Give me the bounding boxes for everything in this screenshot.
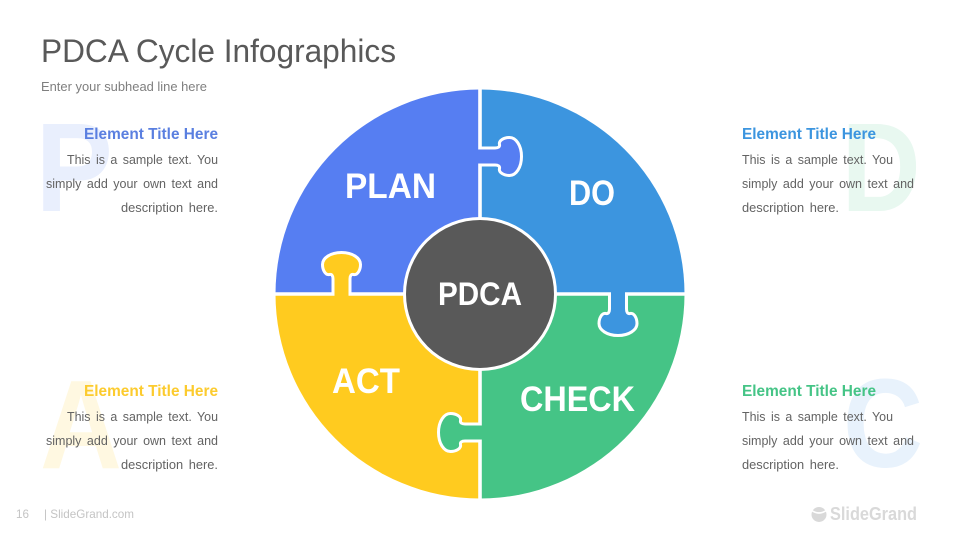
check body text — [742, 410, 914, 472]
act body text — [46, 410, 218, 472]
do body text: simply add your own text and — [742, 177, 914, 191]
watermark letter C: C — [843, 354, 923, 495]
puzzle tab: check into act — [438, 414, 482, 452]
do element title: Element Title Here — [742, 126, 876, 143]
title: PDCA Cycle Infographics — [41, 33, 396, 69]
label: check: CHECK — [520, 380, 635, 419]
check body text: simply add your own text and — [742, 434, 914, 448]
icon: logo ball — [811, 507, 827, 522]
act body text: simply add your own text and — [46, 434, 218, 448]
puzzle tab: plan into do — [478, 138, 522, 176]
logo wordmark: SlideGrand — [830, 504, 917, 524]
act body text: description here. — [121, 458, 218, 472]
act element title: Element Title Here — [84, 383, 218, 400]
plan body text: This is a sample text. You — [67, 153, 218, 167]
watermark letter A: A — [40, 354, 122, 495]
check body text: description here. — [742, 458, 839, 472]
footer logo — [811, 504, 917, 524]
watermark letter D: D — [842, 98, 921, 239]
footer site name: | SlideGrand.com — [44, 507, 134, 521]
check element title: Element Title Here — [742, 383, 876, 400]
label: act: ACT — [332, 362, 400, 401]
plan body text: simply add your own text and — [46, 177, 218, 191]
do body text: This is a sample text. You — [742, 153, 893, 167]
puzzle piece: do — [480, 90, 684, 294]
check body text: This is a sample text. You — [742, 410, 893, 424]
puzzle tab: act into plan — [322, 252, 360, 296]
do body text — [742, 153, 914, 215]
puzzle tab: do into check — [599, 292, 637, 336]
panel: act description — [40, 354, 218, 495]
panel: do description — [742, 98, 921, 239]
label: do: DO — [569, 174, 615, 213]
footer page number: 16 — [16, 507, 29, 521]
puzzle piece: plan — [276, 90, 480, 294]
plan element title: Element Title Here — [84, 126, 218, 143]
plan body text — [46, 153, 218, 215]
label: PDCA: PDCA — [438, 276, 522, 312]
plan body text: description here. — [121, 201, 218, 215]
panel: plan description — [36, 97, 218, 238]
act body text: This is a sample text. You — [67, 410, 218, 424]
center hub — [404, 218, 556, 370]
label: plan: PLAN — [345, 167, 436, 206]
chart: PDCA puzzle circle — [272, 86, 688, 502]
puzzle piece: check — [480, 294, 684, 498]
panel: check description — [742, 354, 923, 495]
do body text: description here. — [742, 201, 839, 215]
puzzle piece: act — [276, 294, 480, 498]
watermark letter P: P — [36, 97, 113, 238]
subhead: Enter your subhead line here — [41, 80, 207, 94]
